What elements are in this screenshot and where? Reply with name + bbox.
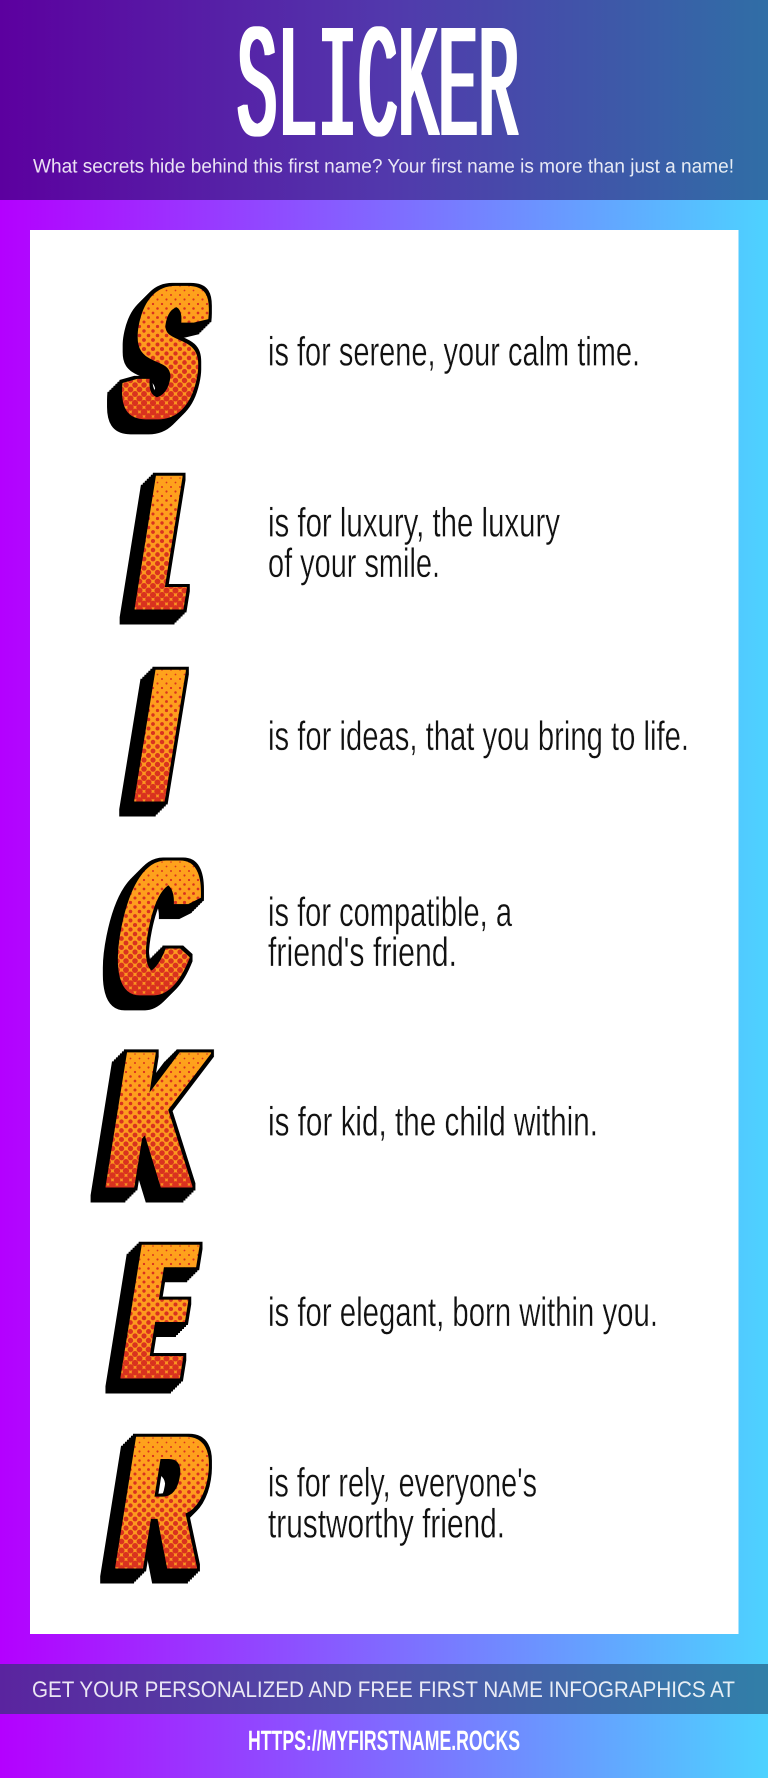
letter E [105,1242,203,1394]
letter C [102,858,204,1010]
white content panel [30,230,738,1634]
header band [0,0,768,200]
text: R lines [268,1460,537,1547]
text: C lines [268,889,512,975]
text: R lines: is for rely, everyone's [268,1460,537,1506]
footer url: HTTPS://MYFIRSTNAME.ROCKS [248,1725,520,1756]
text: K line: is for kid, the child within. [268,1099,598,1145]
text: C lines: friend's friend. [268,929,457,975]
letter L [120,472,190,624]
letter S [107,282,212,434]
letter R [100,1434,212,1584]
text: C lines: is for compatible, a [268,889,512,935]
letter K [90,1049,214,1202]
letter I [119,666,189,816]
title: SLICKER [237,2,518,184]
text: R lines: trustworthy friend. [268,1501,505,1547]
text: L lines [268,500,560,586]
text: L lines: of your smile. [268,540,440,586]
footer band [0,1664,768,1714]
subtitle: What secrets hide behind this first name? Your first name is more than just a name! [33,156,734,178]
text: L lines: is for luxury, the luxury [268,500,560,546]
